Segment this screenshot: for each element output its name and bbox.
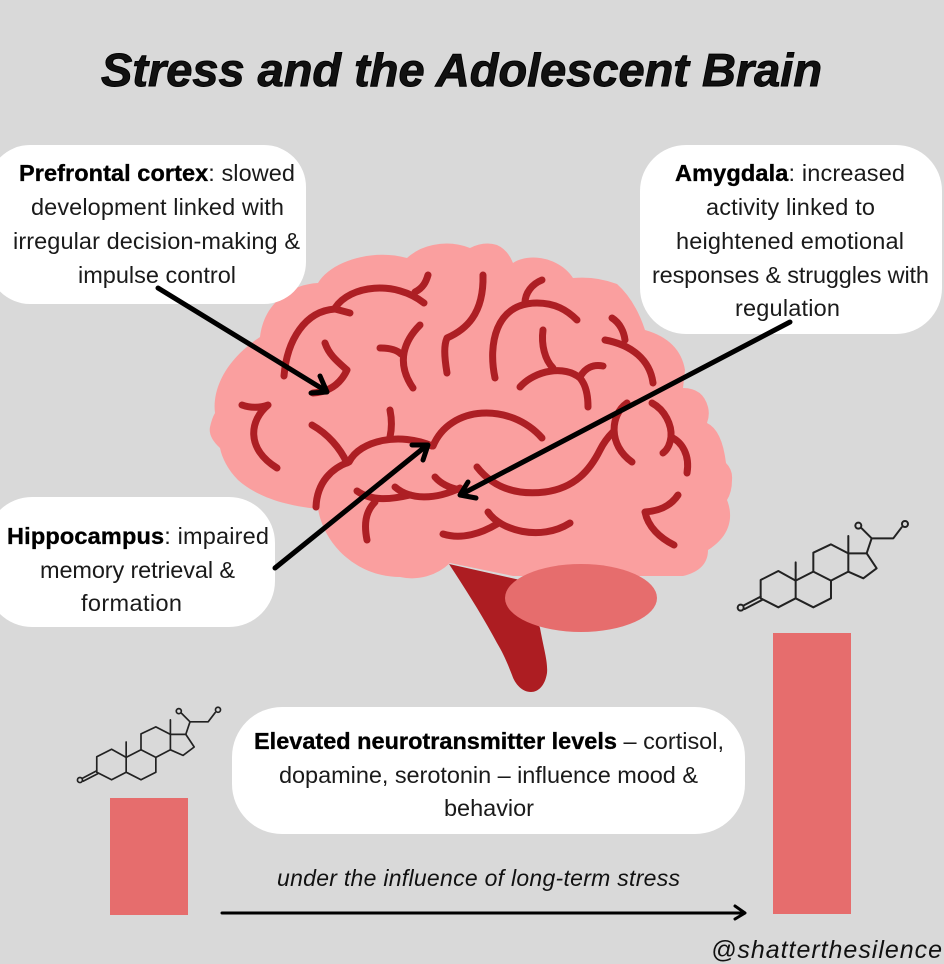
callout: amygdala: activity linked to — [706, 194, 875, 220]
arrow: time axis — [222, 906, 745, 919]
callout: amygdala: heightened emotional — [676, 228, 904, 254]
icon: steroid molecule, low level — [77, 707, 221, 783]
callout: hippocampus: formation — [81, 590, 182, 616]
callout: neurotransmitter levels — [232, 707, 745, 834]
cerebellum — [505, 564, 657, 632]
callout: amygdala: responses & struggles with — [652, 262, 929, 288]
brain folds — [242, 275, 688, 545]
brain stem — [449, 564, 547, 692]
arrow: prefrontal cortex — [158, 288, 327, 393]
arrow: amygdala — [460, 322, 790, 498]
callout: prefrontal cortex: irregular decision-making & — [13, 228, 300, 254]
callout: amygdala — [640, 145, 942, 334]
brain illustration — [210, 244, 732, 692]
brain cerebrum — [210, 244, 732, 578]
caption: long-term stress: under the influence of long-term stress — [277, 865, 680, 891]
handle: @shatterthesilence — [711, 936, 942, 964]
callout: prefrontal cortex — [0, 145, 306, 304]
bar: low level — [110, 798, 188, 915]
callout: hippocampus: memory retrieval & — [40, 557, 235, 583]
callout: prefrontal cortex: Prefrontal cortex: slowed — [19, 160, 295, 186]
icon: steroid molecule, high level — [738, 521, 908, 611]
title: Stress and the Adolescent Brain — [101, 44, 822, 96]
callout: prefrontal cortex: impulse control — [78, 262, 236, 288]
callout: neurotransmitter levels: dopamine, serotonin – influence mood & — [279, 762, 698, 788]
callout: hippocampus — [0, 497, 275, 627]
arrow: hippocampus — [275, 445, 428, 568]
callout: prefrontal cortex: development linked with — [31, 194, 284, 220]
bar: high level — [773, 633, 851, 914]
callout: amygdala: regulation — [735, 295, 840, 321]
callout: hippocampus: Hippocampus: impaired — [7, 523, 269, 549]
callout: neurotransmitter levels: behavior — [444, 795, 534, 821]
callout: neurotransmitter levels: Elevated neurotransmitter levels – cortisol, — [254, 728, 724, 754]
callout: amygdala: Amygdala: increased — [675, 160, 905, 186]
